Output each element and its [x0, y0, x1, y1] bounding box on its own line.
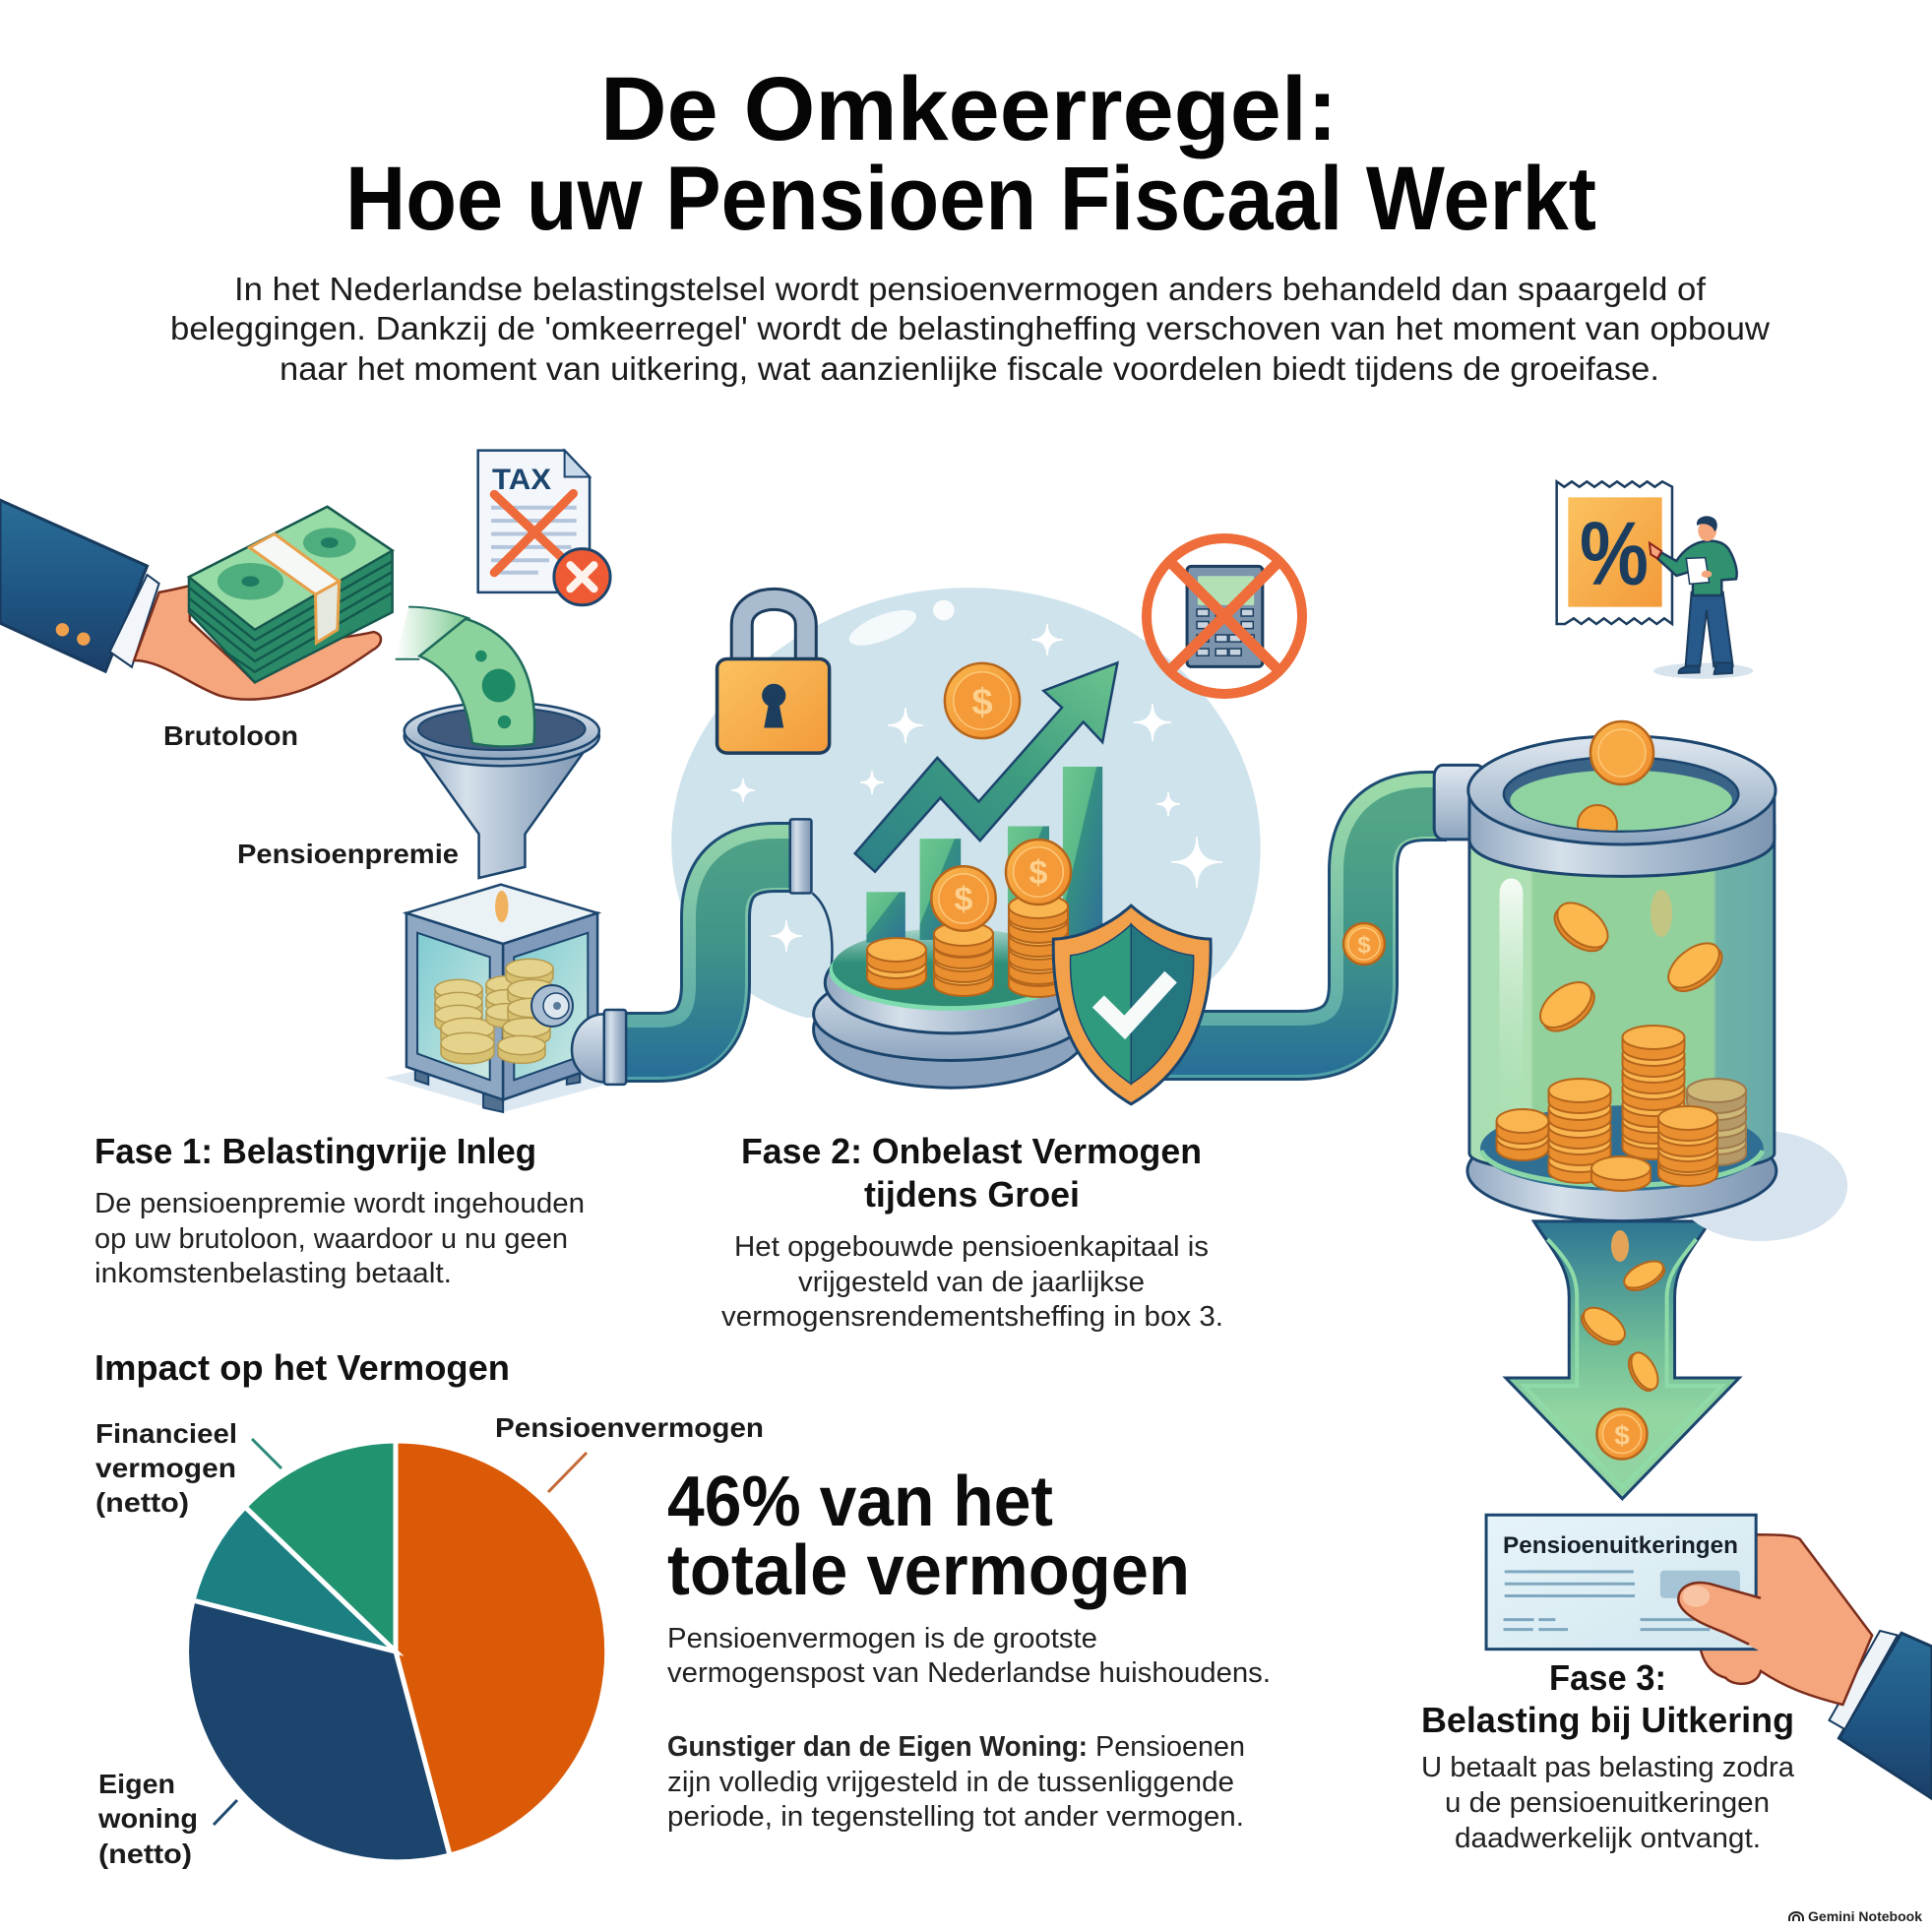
slice: overig — [193, 1507, 396, 1652]
outflow arrow — [1506, 1221, 1739, 1499]
pie labels: woning — [97, 1803, 198, 1834]
pie labels: vermogen — [95, 1453, 236, 1483]
phase 1 text: Fase 1: Belastingvrije Inleg — [94, 1131, 536, 1171]
banknote stack — [189, 507, 393, 682]
sleeve — [0, 500, 159, 671]
big statistic: totale vermogen — [667, 1531, 1190, 1610]
dollar coin: on stack middle — [931, 866, 996, 931]
coins in arrow — [1576, 1230, 1668, 1395]
title: Hoe uw Pensioen Fiscaal Werkt — [345, 149, 1596, 249]
heading: impact: Impact op het Vermogen — [94, 1347, 510, 1388]
dollar coin: floating: $ — [971, 682, 993, 723]
icon: tax percentage ticket with person — [1557, 481, 1753, 679]
dollar coin in pipe: $ — [1357, 932, 1371, 959]
phase 2 text: tijdens Groei — [864, 1174, 1080, 1215]
pie chart — [187, 1441, 607, 1862]
glass body — [1469, 825, 1775, 1174]
favourable note: Gunstiger dan de Eigen Woning: — [667, 1731, 1088, 1763]
favourable note: periode, in tegenstelling tot ander vermogen. — [667, 1801, 1244, 1833]
big statistic: 46% van het — [667, 1463, 1053, 1541]
blob background of phase 2 — [671, 588, 1261, 1018]
card label: Pensioenuitkeringen — [1503, 1532, 1738, 1559]
pipe elbow at safe — [572, 1010, 626, 1085]
favourable note: zijn volledig vrijgesteld in de tussenliggende — [667, 1767, 1234, 1798]
icon: hand with banknotes — [0, 500, 393, 700]
icon: funnel with falling banknote — [396, 607, 599, 878]
dollar coin: floating — [945, 663, 1020, 738]
phase 3 text: Belasting bij Uitkering — [1421, 1700, 1794, 1740]
dollar coin: on stack right: $ — [1029, 854, 1048, 892]
person — [1650, 516, 1753, 679]
sparkles — [731, 624, 1222, 952]
slice: eigen woning — [187, 1600, 450, 1862]
ticket — [1557, 481, 1672, 624]
icon: tax document crossed out — [478, 451, 610, 605]
title — [345, 59, 1596, 249]
phase 1 text — [94, 1131, 585, 1289]
slice: financieel vermogen — [245, 1441, 396, 1652]
dollar coin: on stack right — [1006, 840, 1071, 904]
pie labels: Eigen — [98, 1769, 175, 1799]
phase 3 text: Fase 3: — [1549, 1657, 1666, 1698]
intro paragraph: naar het moment van uitkering, wat aanzienlijke fiscale voordelen biedt tijdens de groeifase. — [280, 350, 1659, 387]
slice: pensioenvermogen 46% — [396, 1441, 607, 1855]
pipe: platform to cylinder — [1161, 806, 1447, 1050]
rim top — [1468, 736, 1776, 844]
safe dial — [531, 985, 573, 1027]
growth platform — [790, 662, 1117, 1088]
rim lower — [1469, 789, 1775, 876]
phase 2 text: vrijgesteld van de jaarlijkse — [798, 1267, 1145, 1298]
phase 1 text: op uw brutoloon, waardoor u nu geen — [94, 1223, 568, 1255]
coins inside cylinder — [1497, 721, 1746, 1191]
statistic explanation — [667, 1623, 1271, 1689]
pie labels — [95, 1412, 764, 1869]
phase 1 text: inkomstenbelasting betaalt. — [94, 1258, 452, 1289]
phase 3 text: u de pensioenuitkeringen — [1445, 1787, 1770, 1819]
collar — [1434, 765, 1485, 840]
rising arrow — [855, 662, 1117, 872]
big statistic — [667, 1463, 1190, 1610]
icon: transparent safe — [385, 885, 615, 1112]
statistic explanation: Pensioenvermogen is de grootste — [667, 1623, 1097, 1654]
phase 3 text: U betaalt pas belasting zodra — [1421, 1752, 1795, 1783]
pie leader lines — [214, 1439, 587, 1825]
tax label: TAX — [492, 464, 551, 496]
safe coins — [435, 959, 555, 1064]
statistic explanation: vermogenspost van Nederlandse huishoudens. — [667, 1657, 1271, 1689]
base — [1467, 1121, 1776, 1221]
dollar coin: on stack middle: $ — [955, 881, 973, 918]
bar chart — [866, 767, 1102, 943]
pipe flange — [790, 819, 811, 893]
favourable note: Pensioenen — [1095, 1731, 1245, 1763]
title: De Omkeerregel: — [600, 59, 1338, 159]
hand — [134, 586, 381, 700]
intro paragraph: beleggingen. Dankzij de 'omkeerregel' wordt de belastingheffing verschoven van het moment van opbouw — [170, 310, 1770, 346]
pie labels: (netto) — [98, 1839, 192, 1869]
pie labels: Pensioenvermogen — [495, 1412, 764, 1443]
pipe: safe to growth platform — [620, 857, 797, 1052]
percent sign: % — [1580, 504, 1649, 604]
phase 3 text — [1421, 1657, 1795, 1854]
thumb — [1678, 1583, 1773, 1650]
phase 2 text: Het opgebouwde pensioenkapitaal is — [734, 1231, 1209, 1263]
dollar coin in pipe — [1343, 923, 1385, 965]
intro paragraph: In het Nederlandse belastingstelsel wordt pensioenvermogen anders behandeld dan spaargeld of — [234, 271, 1707, 307]
phase 2 text: Fase 2: Onbelast Vermogen — [741, 1131, 1202, 1171]
coin stacks on platform — [867, 895, 1068, 997]
hand holding pension card — [1486, 1515, 1932, 1798]
label: Brutoloon: Brutoloon — [163, 720, 298, 751]
dollar coin in arrow: $ — [1614, 1420, 1630, 1451]
cylinder tank — [1434, 736, 1776, 1221]
phase 2 text — [721, 1131, 1223, 1333]
label: Pensioenpremie: Pensioenpremie — [237, 839, 459, 869]
favourable note — [667, 1731, 1245, 1833]
shadow under cylinder — [1674, 1131, 1847, 1241]
sleeve — [1829, 1631, 1932, 1798]
dollar coin in arrow — [1596, 1409, 1648, 1459]
icon: crossed-out calculator — [1147, 538, 1302, 694]
hand back — [1700, 1534, 1872, 1705]
pie labels: (netto) — [95, 1487, 189, 1518]
intro paragraph — [170, 271, 1770, 387]
phase 2 text: vermogensrendementsheffing in box 3. — [721, 1301, 1223, 1333]
pension card — [1486, 1515, 1756, 1650]
phase 1 text: De pensioenpremie wordt ingehouden — [94, 1188, 585, 1219]
pie labels: Financieel — [95, 1418, 237, 1449]
icon: padlock — [717, 599, 830, 753]
icon: shield with check — [1053, 905, 1211, 1104]
phase 3 text: daadwerkelijk ontvangt. — [1455, 1823, 1761, 1854]
watermark: Gemini Notebook — [1808, 1908, 1922, 1924]
